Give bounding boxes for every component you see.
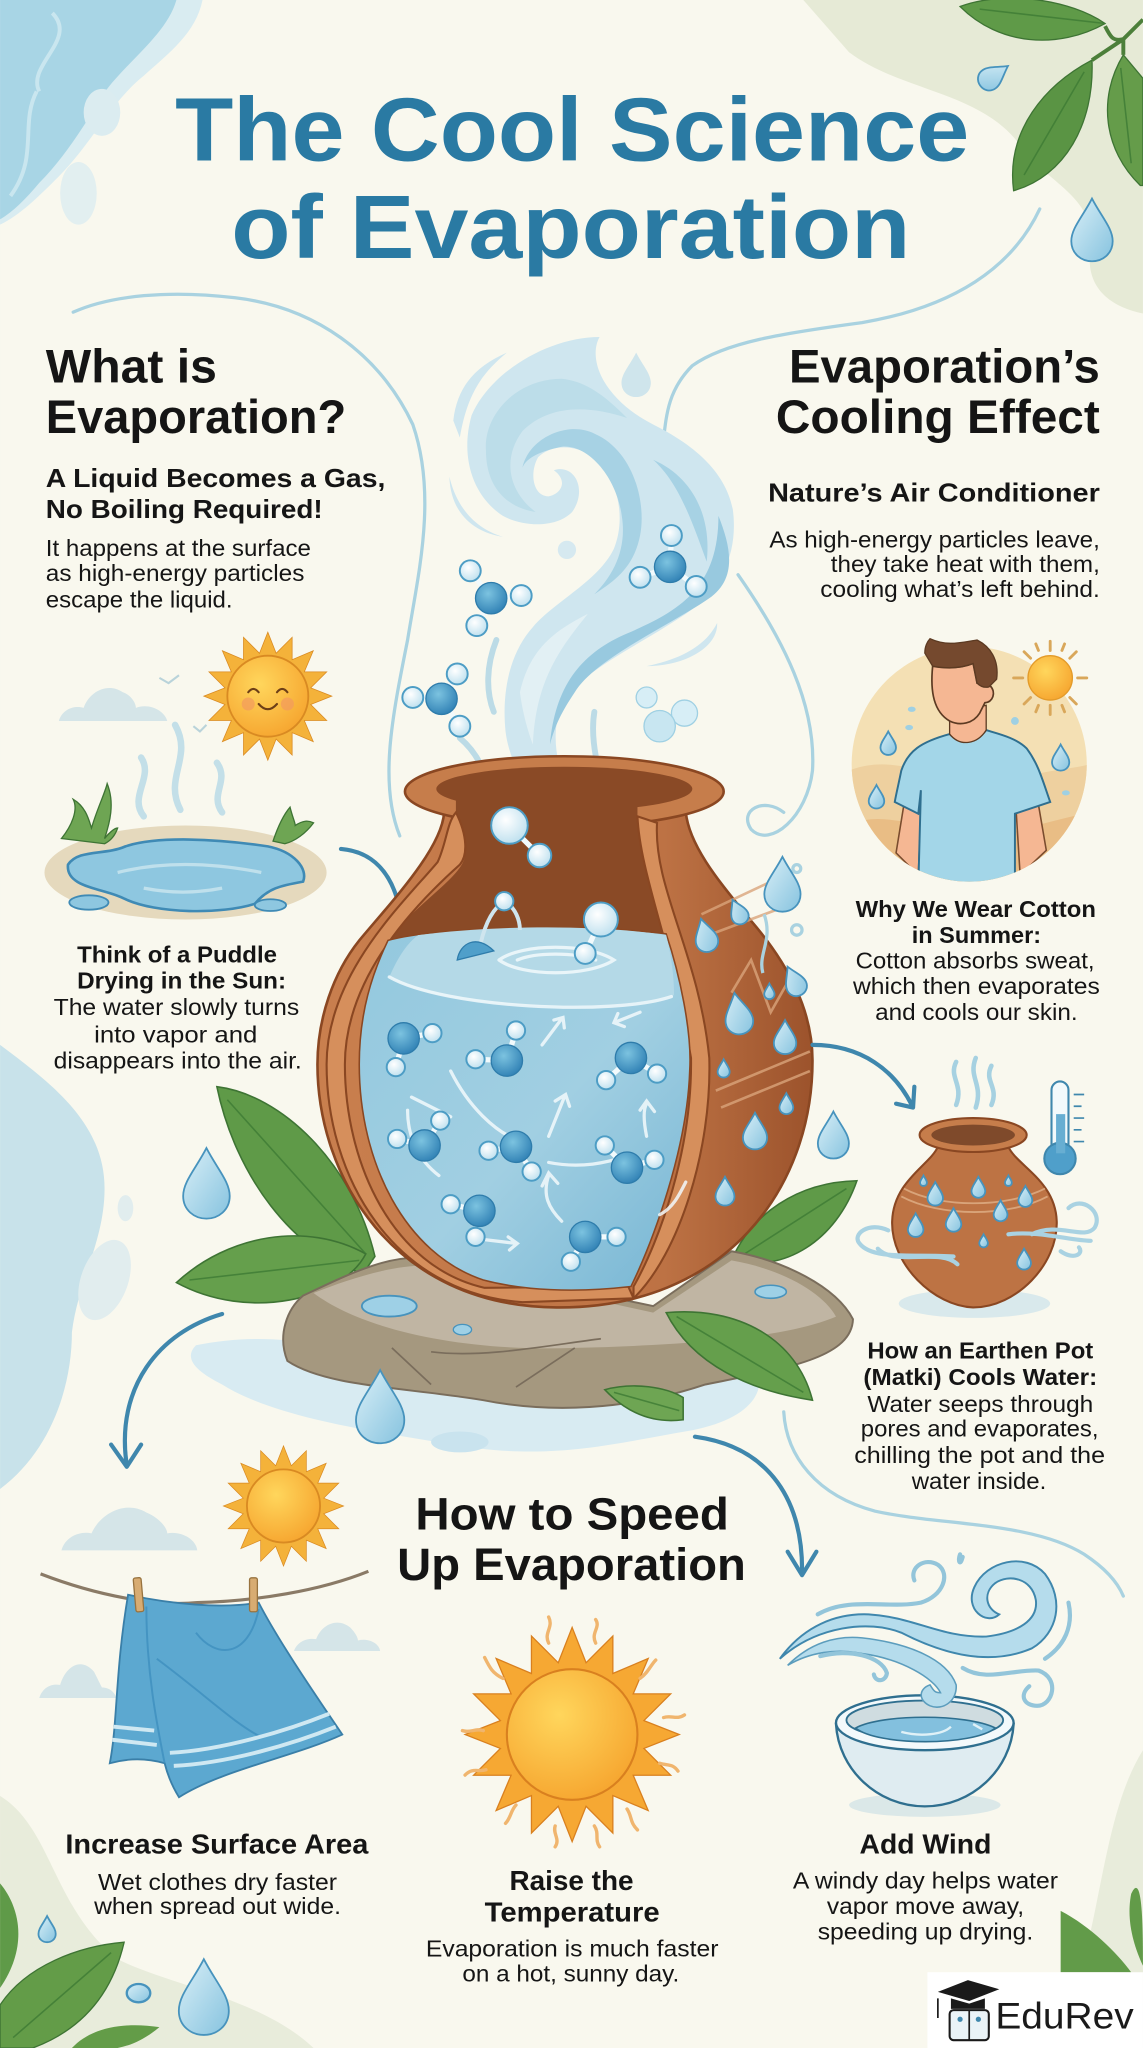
illustration: earthen pot with thermometer <box>858 1058 1097 1318</box>
section: what is evaporation: Evaporation? <box>46 390 346 443</box>
section: cooling effect: As high-energy particles leave, <box>769 526 1100 552</box>
text: add wind: A windy day helps water <box>793 1868 1058 1894</box>
arrow: puddle to pot <box>341 849 400 909</box>
thermometer <box>1044 1081 1084 1174</box>
text: add wind <box>793 1828 1058 1945</box>
logo: EduRev: EduRev <box>995 1994 1134 2036</box>
main wind ribbon <box>780 1561 1056 1659</box>
pot pattern <box>701 872 810 1108</box>
text: increase surface area: when spread out wide. <box>93 1893 341 1919</box>
text: cotton caption: Why We Wear Cotton <box>856 896 1096 922</box>
hair <box>925 639 997 687</box>
pot body <box>317 812 812 1307</box>
small pot body <box>892 1147 1057 1307</box>
text: puddle caption: The water slowly turns <box>54 994 299 1020</box>
text: cotton caption: and cools our skin. <box>875 999 1078 1025</box>
circulation arrows <box>408 1012 686 1250</box>
text: matki caption: chilling the pot and the <box>854 1442 1105 1468</box>
section: cooling effect: Nature’s Air Conditioner <box>768 478 1100 508</box>
text: raise the temperature: Temperature <box>485 1896 660 1927</box>
text: puddle caption: Drying in the Sun: <box>77 968 286 994</box>
title: The Cool Science <box>175 80 969 181</box>
section: what is evaporation <box>46 340 385 612</box>
section: what is evaporation: as high-energy particles <box>46 560 304 586</box>
section: what is evaporation: What is <box>46 340 217 393</box>
text: raise the temperature: on a hot, sunny day. <box>462 1960 679 1986</box>
text: add wind: vapor move away, <box>827 1893 1024 1919</box>
title <box>175 80 969 278</box>
text: increase surface area: Wet clothes dry faster <box>98 1869 337 1895</box>
text: puddle caption: into vapor and <box>94 1021 257 1047</box>
stone base <box>283 1251 853 1408</box>
pool under stone <box>191 1339 759 1452</box>
text: matki caption: water inside. <box>911 1468 1046 1494</box>
foliage: bottom right <box>1061 1750 1143 1985</box>
text: cotton caption: in Summer: <box>912 922 1041 948</box>
icon: smiling sun <box>204 632 332 760</box>
bowl <box>836 1695 1014 1806</box>
leaves in front of stone <box>605 1312 812 1421</box>
water drops on pot wall <box>690 896 810 1206</box>
icon: graduation cap and book <box>938 1980 999 2040</box>
arrow: stone to wind <box>695 1437 816 1575</box>
text: raise the temperature: Evaporation is much faster <box>426 1936 719 1962</box>
text: matki caption: How an Earthen Pot <box>867 1337 1093 1363</box>
icon: birds <box>159 675 206 731</box>
arrow: stone to surface area <box>111 1314 222 1467</box>
text: cotton caption: Cotton absorbs sweat, <box>856 947 1095 973</box>
decorative flowing lines <box>73 209 1123 1596</box>
neck <box>950 705 986 743</box>
section: cooling effect: they take heat with them, <box>831 551 1100 577</box>
text: increase surface area: Increase Surface Area <box>65 1828 369 1859</box>
text: raise the temperature: Raise the <box>509 1865 634 1896</box>
text: matki caption <box>854 1337 1105 1494</box>
heading: how to speed up evaporation <box>397 1488 746 1590</box>
logo: EduRev <box>927 1972 1143 2048</box>
section: what is evaporation: It happens at the surface <box>46 535 311 561</box>
illustration: wind over bowl <box>780 1554 1070 1817</box>
steam plume <box>449 337 734 836</box>
illustration: towel on clothesline <box>41 1571 368 1797</box>
wind ribbon into bowl <box>788 1637 956 1707</box>
pot rim <box>405 756 724 827</box>
section: what is evaporation: escape the liquid. <box>46 586 233 612</box>
illustration: big hot sun <box>462 1617 684 1847</box>
water <box>359 928 690 1290</box>
text: increase surface area <box>65 1828 369 1919</box>
section: what is evaporation: A Liquid Becomes a Gas, <box>46 463 385 493</box>
right wall cut edge <box>634 816 709 1298</box>
text: puddle caption <box>54 942 302 1073</box>
text: raise the temperature <box>426 1865 719 1986</box>
text: add wind: Add Wind <box>859 1828 991 1859</box>
text: puddle caption: disappears into the air. <box>54 1047 302 1073</box>
face <box>932 664 993 724</box>
cloud near smiling sun <box>59 688 167 721</box>
water wash: top left <box>0 0 203 225</box>
floating molecules above pot <box>402 525 707 742</box>
section: cooling effect: cooling what’s left behind. <box>820 576 1100 602</box>
water wash: left edge <box>0 1045 141 1489</box>
heading: how to speed up evaporation: Up Evaporation <box>397 1539 746 1590</box>
vapor lines <box>954 1058 994 1108</box>
text: puddle caption: Think of a Puddle <box>77 942 277 968</box>
text: matki caption: (Matki) Cools Water: <box>863 1364 1097 1390</box>
illustration: puddle drying in the sun <box>44 725 327 920</box>
text: cotton caption <box>852 896 1100 1025</box>
text: matki caption: pores and evaporates, <box>861 1416 1099 1442</box>
small wind curls <box>818 1554 1070 1706</box>
pot interior <box>388 792 666 940</box>
molecules escaping at surface and in neck <box>457 807 618 964</box>
central earthen pot cutaway <box>317 756 812 1307</box>
water molecules inside pot <box>387 1021 666 1271</box>
icon: sun near towel <box>223 1446 344 1566</box>
section: what is evaporation: No Boiling Required! <box>46 494 323 524</box>
illustration: man in cotton shirt <box>849 639 1091 888</box>
clouds near towel <box>39 1508 380 1698</box>
section: cooling effect: Evaporation’s <box>789 340 1100 393</box>
foliage wash and leaves: top right <box>803 0 1143 313</box>
heading: how to speed up evaporation: How to Speed <box>415 1488 729 1539</box>
vapor wisp right of pot <box>762 865 802 973</box>
text: matki caption: Water seeps through <box>867 1391 1093 1417</box>
text: cotton caption: which then evaporates <box>852 973 1100 999</box>
section: cooling effect <box>768 340 1100 602</box>
title: of Evaporation <box>231 177 910 278</box>
section: cooling effect: Cooling Effect <box>776 390 1100 443</box>
left wall cut edge <box>327 812 634 1302</box>
small pot drops <box>908 1176 1032 1270</box>
arrow: pot to matki <box>812 1045 914 1108</box>
leaves behind pot <box>176 1087 857 1303</box>
icon: sun with rays <box>1014 641 1087 714</box>
text: add wind: speeding up drying. <box>818 1919 1033 1945</box>
foliage: bottom left <box>0 1796 314 2048</box>
wind swirls <box>858 1204 1097 1264</box>
